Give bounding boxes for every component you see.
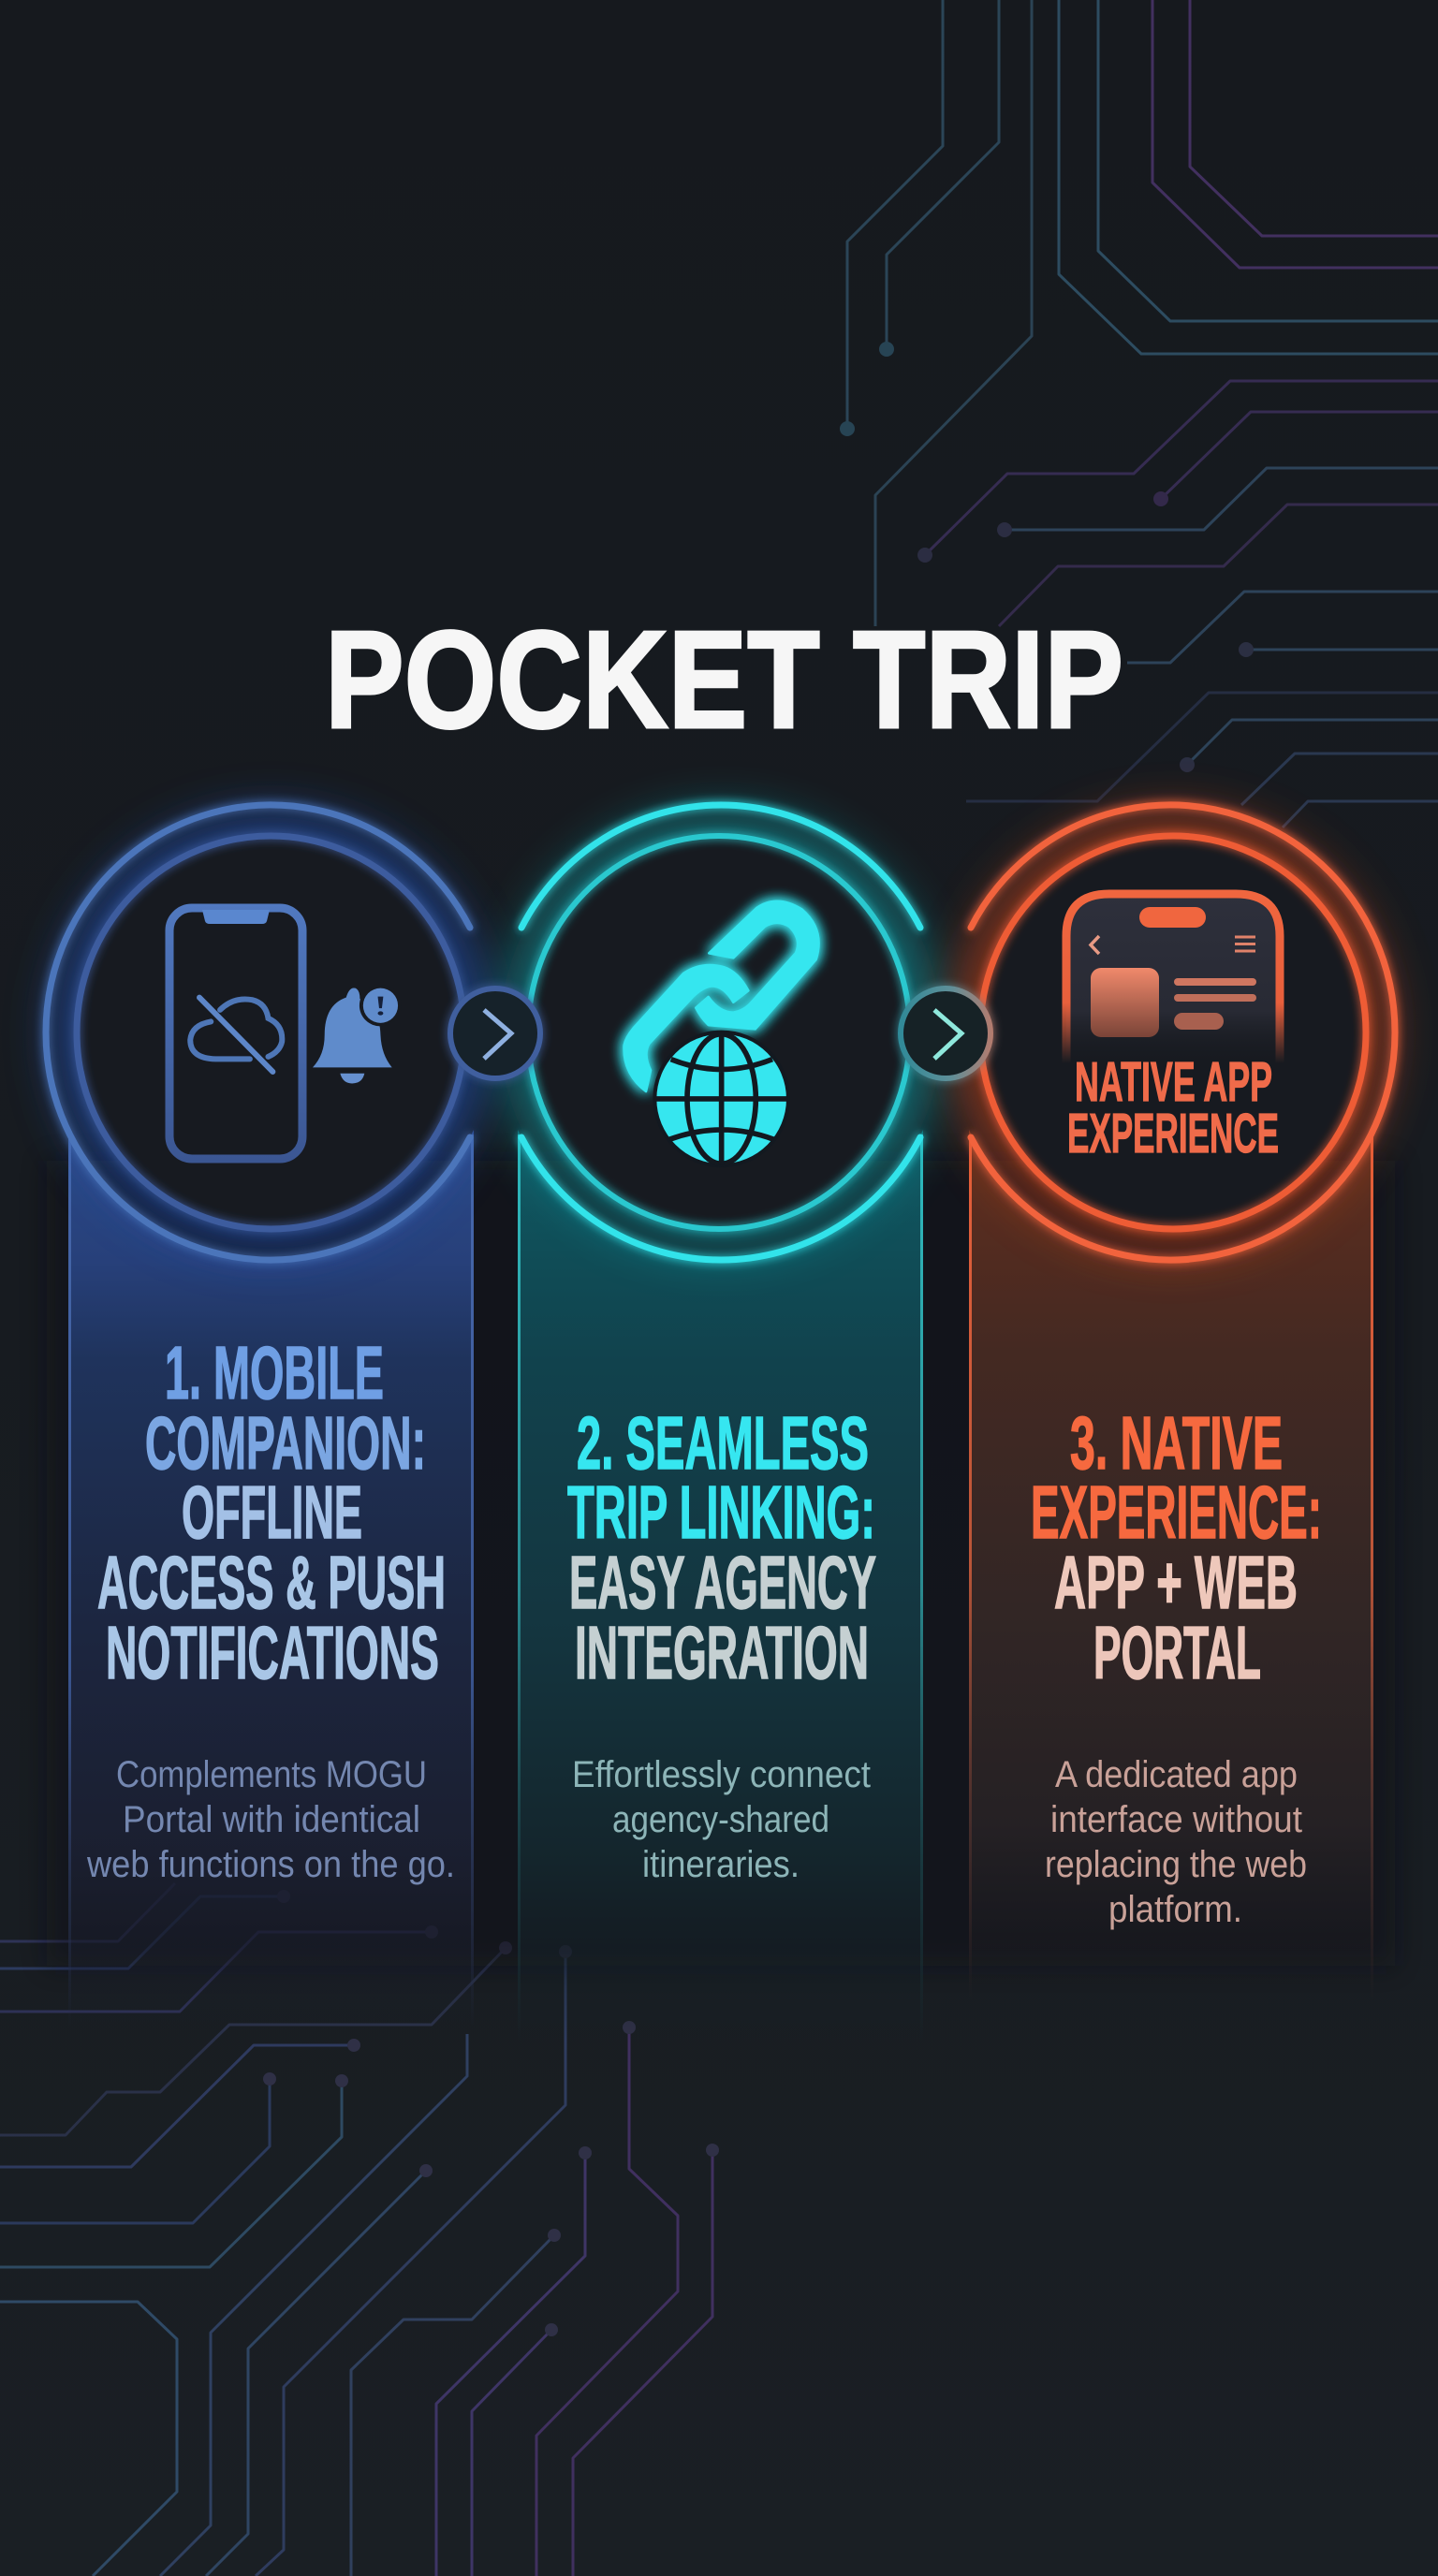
icon: app phone mockup	[1066, 894, 1280, 1063]
circle 3: orange ring with app screen	[951, 805, 1395, 1260]
heading: panel 3: 3. NATIVE	[1070, 1401, 1283, 1485]
icon: chain links	[624, 901, 819, 1091]
title: POCKET TRIP	[325, 603, 1123, 757]
body text: panel 3: A dedicated app	[1055, 1754, 1298, 1795]
heading: panel 3	[1031, 1401, 1322, 1694]
body text: panel 2	[572, 1754, 871, 1885]
heading: panel 2	[567, 1401, 876, 1694]
circle 2: cyan ring with chain and globe	[500, 805, 942, 1260]
body text: panel 2: agency-shared	[612, 1799, 829, 1840]
heading: panel 2: EASY AGENCY	[569, 1541, 876, 1624]
heading: panel 1: OFFLINE	[182, 1471, 362, 1554]
body text: panel 2: Effortlessly connect	[572, 1754, 871, 1795]
label: native app experience	[1067, 1051, 1279, 1164]
circle 1: blue ring with phone and bell	[46, 805, 492, 1260]
heading: panel 1: 1. MOBILE	[165, 1331, 384, 1414]
body text: panel 2: itineraries.	[642, 1844, 800, 1885]
body text: panel 3: replacing the web	[1045, 1844, 1307, 1885]
heading: panel 1: ACCESS & PUSH	[97, 1541, 446, 1624]
heading: panel 1: NOTIFICATIONS	[106, 1611, 439, 1694]
panel: seamless trip linking	[518, 1130, 923, 2041]
circuit traces: top right	[840, 0, 1438, 827]
arrow 1	[450, 988, 540, 1078]
heading: panel 1	[97, 1331, 446, 1694]
icon: globe	[653, 1031, 790, 1167]
circuit traces: bottom left	[0, 1883, 719, 2576]
body text: panel 1: web functions on the go.	[86, 1844, 455, 1885]
icon: notification bell	[313, 985, 402, 1083]
arrow 2	[901, 988, 990, 1078]
label: native app experience: EXPERIENCE	[1067, 1103, 1279, 1164]
body text: panel 3	[1045, 1754, 1307, 1930]
body text: panel 3: platform.	[1108, 1889, 1242, 1930]
body text: panel 1: Complements MOGU	[116, 1754, 427, 1795]
body text: panel 1	[86, 1754, 455, 1885]
heading: panel 2: 2. SEAMLESS	[577, 1401, 869, 1485]
panel: mobile companion	[68, 1130, 474, 2027]
body text: panel 1: Portal with identical	[123, 1799, 420, 1840]
heading: panel 2: TRIP LINKING:	[567, 1471, 875, 1554]
icon: crossed-out cloud	[190, 998, 282, 1072]
panel shadow	[47, 1161, 1395, 1966]
body text: panel 3: interface without	[1050, 1799, 1302, 1840]
heading: panel 1: COMPANION:	[145, 1401, 426, 1485]
icon: phone outline	[169, 908, 302, 1159]
label: native app experience: NATIVE APP	[1075, 1051, 1272, 1113]
heading: panel 3: PORTAL	[1093, 1611, 1261, 1694]
heading: panel 2: INTEGRATION	[575, 1611, 869, 1694]
panel: native experience	[969, 1130, 1373, 1998]
